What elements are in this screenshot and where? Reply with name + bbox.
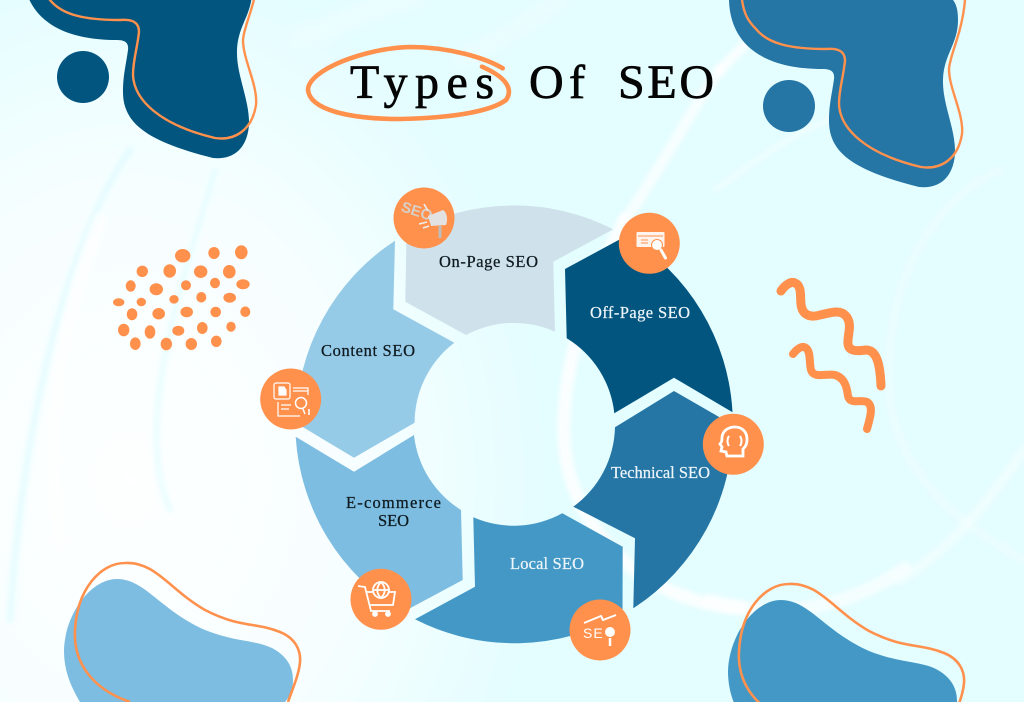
- orange squiggles: [781, 282, 881, 429]
- decorative blob: bottom left: [64, 563, 300, 702]
- segment: Local SEO: Local SEO: [510, 554, 584, 573]
- cycle diagram: [296, 205, 733, 643]
- icon: shopping cart with globe: [350, 569, 412, 630]
- icon: SEO growth magnifier: SE: [583, 625, 604, 641]
- icon: browser with magnifier: [619, 213, 680, 274]
- decorative blob: bottom right: [728, 584, 964, 702]
- decorative blob: top left: [23, 0, 259, 158]
- title text: Of: [529, 56, 585, 109]
- segment: E-commerce SEO: SEO: [378, 511, 409, 530]
- icon: megaphone: [394, 188, 454, 248]
- title text: [350, 56, 714, 109]
- segment: Technical SEO: Technical SEO: [611, 463, 710, 482]
- segment: E-commerce SEO: [296, 435, 463, 612]
- decorative blob: top right: [729, 0, 965, 187]
- segment: Content SEO: Content SEO: [321, 341, 415, 360]
- title: [308, 47, 714, 119]
- segment: On-Page SEO: [405, 205, 613, 335]
- icon: SEO growth magnifier: [570, 600, 630, 660]
- segment: On-Page SEO: On-Page SEO: [439, 252, 538, 271]
- segment: Local SEO: [415, 513, 623, 643]
- orange dot cluster: [113, 245, 250, 350]
- segment: Technical SEO: [573, 391, 733, 608]
- icon: megaphone: SEO: [399, 199, 435, 225]
- title text: Types: [350, 56, 494, 109]
- scribble circle around Types: [308, 47, 509, 119]
- title text: SEO: [618, 56, 714, 109]
- icon: head with headset: [703, 414, 764, 475]
- segment: Content SEO: [296, 241, 454, 458]
- segment: Off-Page SEO: Off-Page SEO: [590, 303, 690, 322]
- segment: E-commerce SEO: E-commerce: [346, 493, 441, 512]
- icon: document search: [260, 368, 321, 430]
- segment: Off-Page SEO: [565, 236, 732, 413]
